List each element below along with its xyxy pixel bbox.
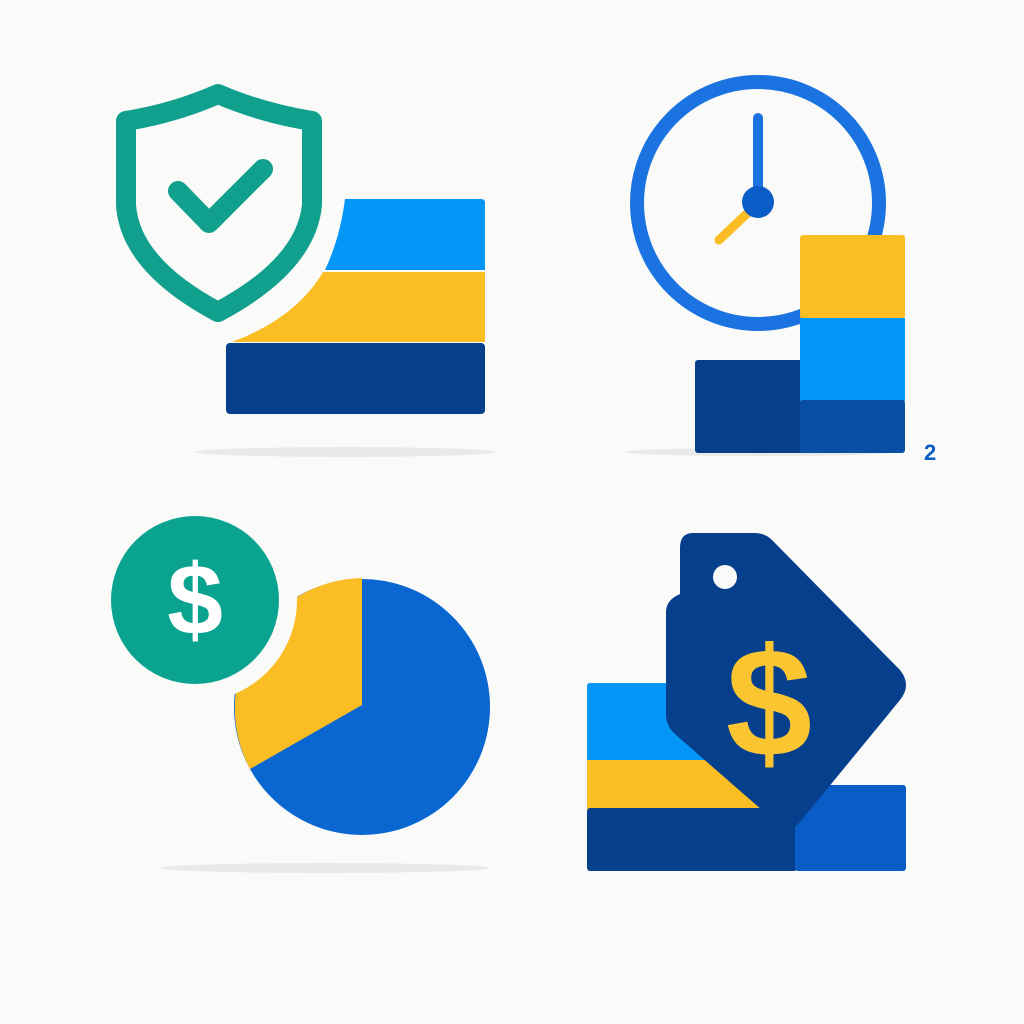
bar chart [587, 683, 906, 871]
stacked bars [226, 199, 485, 414]
label: 2: 2 [924, 440, 936, 465]
panel: price tag and bars [587, 533, 906, 871]
bar chart [695, 235, 905, 453]
panel: clock and bars [625, 82, 936, 465]
panel: security and stacked bars [126, 94, 495, 457]
icon: dollar coin [111, 516, 279, 684]
icon: dollar coin: $ [167, 544, 223, 656]
icon: price tag: $ [726, 616, 812, 789]
icon: clock [637, 82, 879, 324]
icon: shield with check [126, 94, 312, 312]
icon: price tag [666, 533, 906, 829]
panel: money pie chart [93, 498, 490, 873]
pie chart [93, 498, 490, 835]
